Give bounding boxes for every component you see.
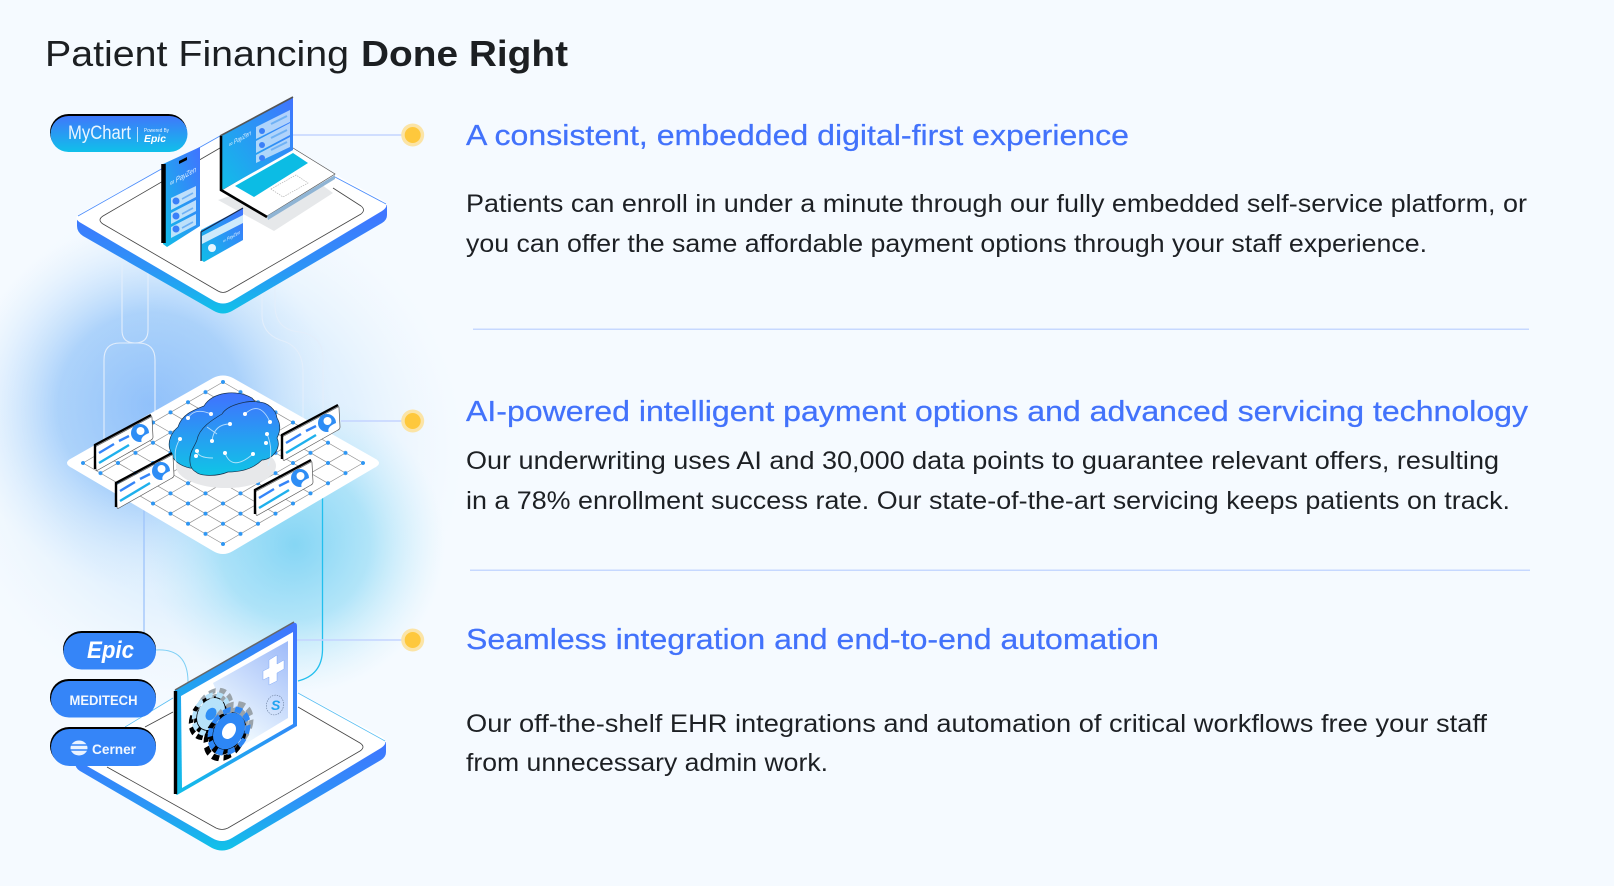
body text bbox=[466, 710, 1487, 777]
payment card bbox=[201, 208, 243, 262]
title bbox=[45, 33, 568, 74]
body text: you can offer the same affordable payment options through your staff experience. bbox=[466, 230, 1427, 258]
heading: Seamless integration and end-to-end automation bbox=[466, 624, 1159, 656]
badge: MyChart powered by Epic: MyChart bbox=[68, 123, 132, 144]
badge: Epic bbox=[63, 631, 156, 670]
body text: from unnecessary admin work. bbox=[466, 749, 828, 777]
heading: AI-powered intelligent payment options and advanced servicing technology bbox=[466, 396, 1529, 428]
payment card chip bbox=[208, 244, 216, 252]
laptop shadow bbox=[218, 182, 333, 231]
laptop base edge bbox=[267, 175, 335, 220]
monitor rim bbox=[175, 622, 294, 690]
badge: MEDITECH bbox=[50, 679, 156, 718]
marker dots bbox=[401, 124, 424, 652]
brain circuit lines bbox=[175, 409, 271, 466]
payment card edge bbox=[201, 208, 243, 261]
background glow: blue bbox=[0, 220, 335, 590]
badge: MyChart powered by Epic: Powered By bbox=[144, 128, 169, 134]
profile card back left bbox=[95, 415, 153, 470]
body text: Our underwriting uses AI and 30,000 data points to guarantee relevant offers, resulting bbox=[466, 447, 1499, 475]
text block: AI-powered payment options bbox=[466, 396, 1529, 515]
platform side bbox=[77, 205, 387, 314]
phone black edge bbox=[161, 164, 166, 243]
body text bbox=[466, 190, 1527, 258]
laptop trackpad bbox=[271, 175, 308, 197]
connector: Epic to monitor bbox=[156, 650, 188, 700]
title: Patient Financing bbox=[45, 33, 349, 74]
badge: Cerner bbox=[50, 727, 156, 766]
divider bbox=[473, 328, 1529, 330]
phone rows bbox=[171, 186, 196, 238]
brain front lobe bbox=[190, 402, 280, 475]
grid dots bbox=[79, 378, 367, 548]
platform edge highlights bbox=[125, 693, 385, 741]
platform inner outline bbox=[107, 707, 363, 830]
heading: A consistent, embedded digital-first experience bbox=[466, 120, 1129, 152]
connector line: blue from grid to Epic bbox=[143, 500, 145, 634]
payment card stripe bbox=[202, 215, 243, 244]
brain shadow bbox=[176, 444, 276, 488]
platform top bbox=[76, 662, 386, 841]
pale connector lines between top and middle layers bbox=[104, 262, 323, 440]
dollar icon bbox=[264, 693, 286, 717]
monitor black edge bbox=[174, 691, 177, 794]
text block: integration and automation bbox=[466, 624, 1487, 777]
platform top bbox=[76, 126, 386, 304]
body text: in a 78% enrollment success rate. Our state-of-the-art servicing keeps patients on track. bbox=[466, 487, 1510, 515]
gear blue bbox=[206, 699, 251, 763]
laptop screen bbox=[220, 97, 293, 190]
badge: Cerner: Cerner bbox=[92, 741, 137, 757]
connector lines to dots bbox=[293, 135, 403, 640]
phone notch bbox=[179, 157, 187, 164]
profile card back right bbox=[282, 405, 340, 460]
laptop rows bbox=[256, 110, 290, 163]
badge: MEDITECH: MEDITECH bbox=[70, 692, 138, 708]
badge: MyChart powered by Epic bbox=[50, 114, 188, 152]
background glow: pale wash bbox=[0, 190, 465, 710]
connector line: cyan from grid to monitor bbox=[298, 490, 322, 681]
illustration: bottom platform with monitor bbox=[75, 622, 386, 850]
platform inner outline bbox=[100, 148, 364, 292]
badge: Epic: Epic bbox=[87, 637, 134, 664]
body text bbox=[466, 447, 1510, 515]
monitor display bbox=[181, 632, 293, 788]
brain back lobe bbox=[169, 393, 262, 470]
background glow: cyan bbox=[145, 395, 445, 695]
laptop black edge bbox=[221, 136, 267, 217]
illustration: top platform with devices bbox=[76, 97, 387, 314]
laptop keyboard bbox=[235, 153, 308, 197]
text block: digital-first experience bbox=[466, 120, 1527, 258]
dollar icon: S bbox=[271, 697, 281, 713]
illustration: middle AI platform bbox=[67, 376, 379, 554]
body text: Our off-the-shelf EHR integrations and automation of critical workflows free your staff bbox=[466, 710, 1487, 738]
plus icon bbox=[263, 655, 284, 685]
badge: MyChart powered by Epic: Epic bbox=[144, 134, 166, 145]
grid lines bbox=[83, 382, 363, 544]
body text: Patients can enroll in under a minute through our fully embedded self-service platform, or bbox=[466, 190, 1527, 218]
laptop base bbox=[222, 148, 335, 216]
phone bbox=[163, 147, 200, 247]
monitor frame bbox=[174, 623, 297, 795]
laptop logo: ∞ PayZen bbox=[229, 128, 251, 149]
gear light bbox=[191, 686, 231, 742]
phone logo: ∞ PayZen bbox=[170, 164, 196, 188]
profile card front left bbox=[116, 453, 174, 508]
platform top bbox=[67, 376, 379, 554]
title: Done Right bbox=[361, 33, 568, 74]
laptop screen rim bbox=[220, 97, 293, 136]
profile card front right bbox=[255, 460, 313, 515]
payment card logo: ∞ PayZen bbox=[223, 230, 240, 245]
platform edge highlights bbox=[78, 136, 386, 216]
divider bbox=[470, 570, 1530, 571]
brain nodes bbox=[178, 412, 272, 458]
platform side bbox=[75, 742, 386, 850]
